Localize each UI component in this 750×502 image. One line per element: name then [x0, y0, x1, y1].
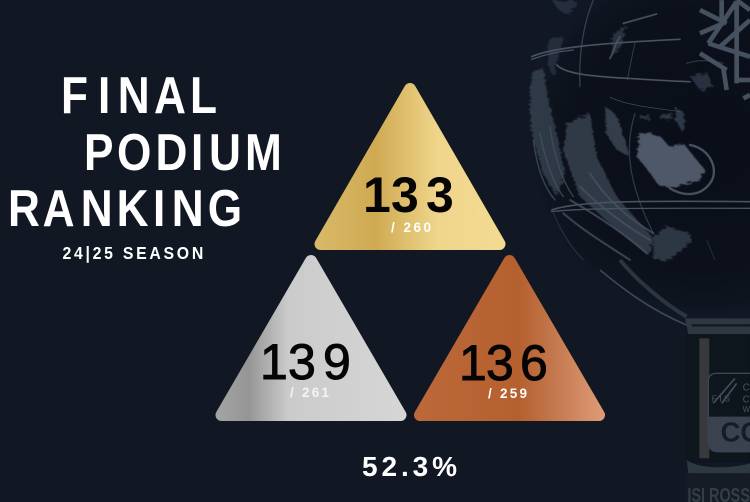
- globe lower rim and neck: [600, 260, 750, 502]
- bronze value: 136: [459, 335, 548, 391]
- bronze total: / 259: [488, 386, 527, 401]
- subtitle: season: 24|25 SEASON: [62, 243, 203, 263]
- silver triangle: [222, 261, 400, 415]
- bronze triangle: [420, 261, 599, 415]
- FIS label: F I S: [712, 394, 730, 404]
- FIS label: W: [743, 405, 750, 414]
- percentage: 52.3%: [362, 451, 457, 482]
- gold total: / 260: [391, 220, 431, 235]
- FIS label: C: [743, 383, 750, 394]
- title line: RANKING: RANKING: [8, 180, 242, 238]
- background image: crystal globe trophy: [529, 0, 750, 502]
- title line: FINAL: FINAL: [61, 67, 217, 125]
- trophy base: [686, 335, 750, 462]
- globe body: [529, 0, 750, 316]
- globe highlights: [532, 0, 750, 260]
- silver total: / 261: [290, 385, 329, 400]
- title: [8, 67, 282, 238]
- title line: PODIUM: PODIUM: [84, 124, 282, 182]
- brushed fills: [529, 0, 713, 260]
- gold value: 133: [363, 167, 454, 223]
- snowflake: [700, 0, 750, 98]
- gold triangle: [320, 89, 500, 244]
- FIS label: C: [743, 395, 750, 406]
- FIS label: [707, 373, 750, 452]
- silver value: 139: [260, 334, 351, 390]
